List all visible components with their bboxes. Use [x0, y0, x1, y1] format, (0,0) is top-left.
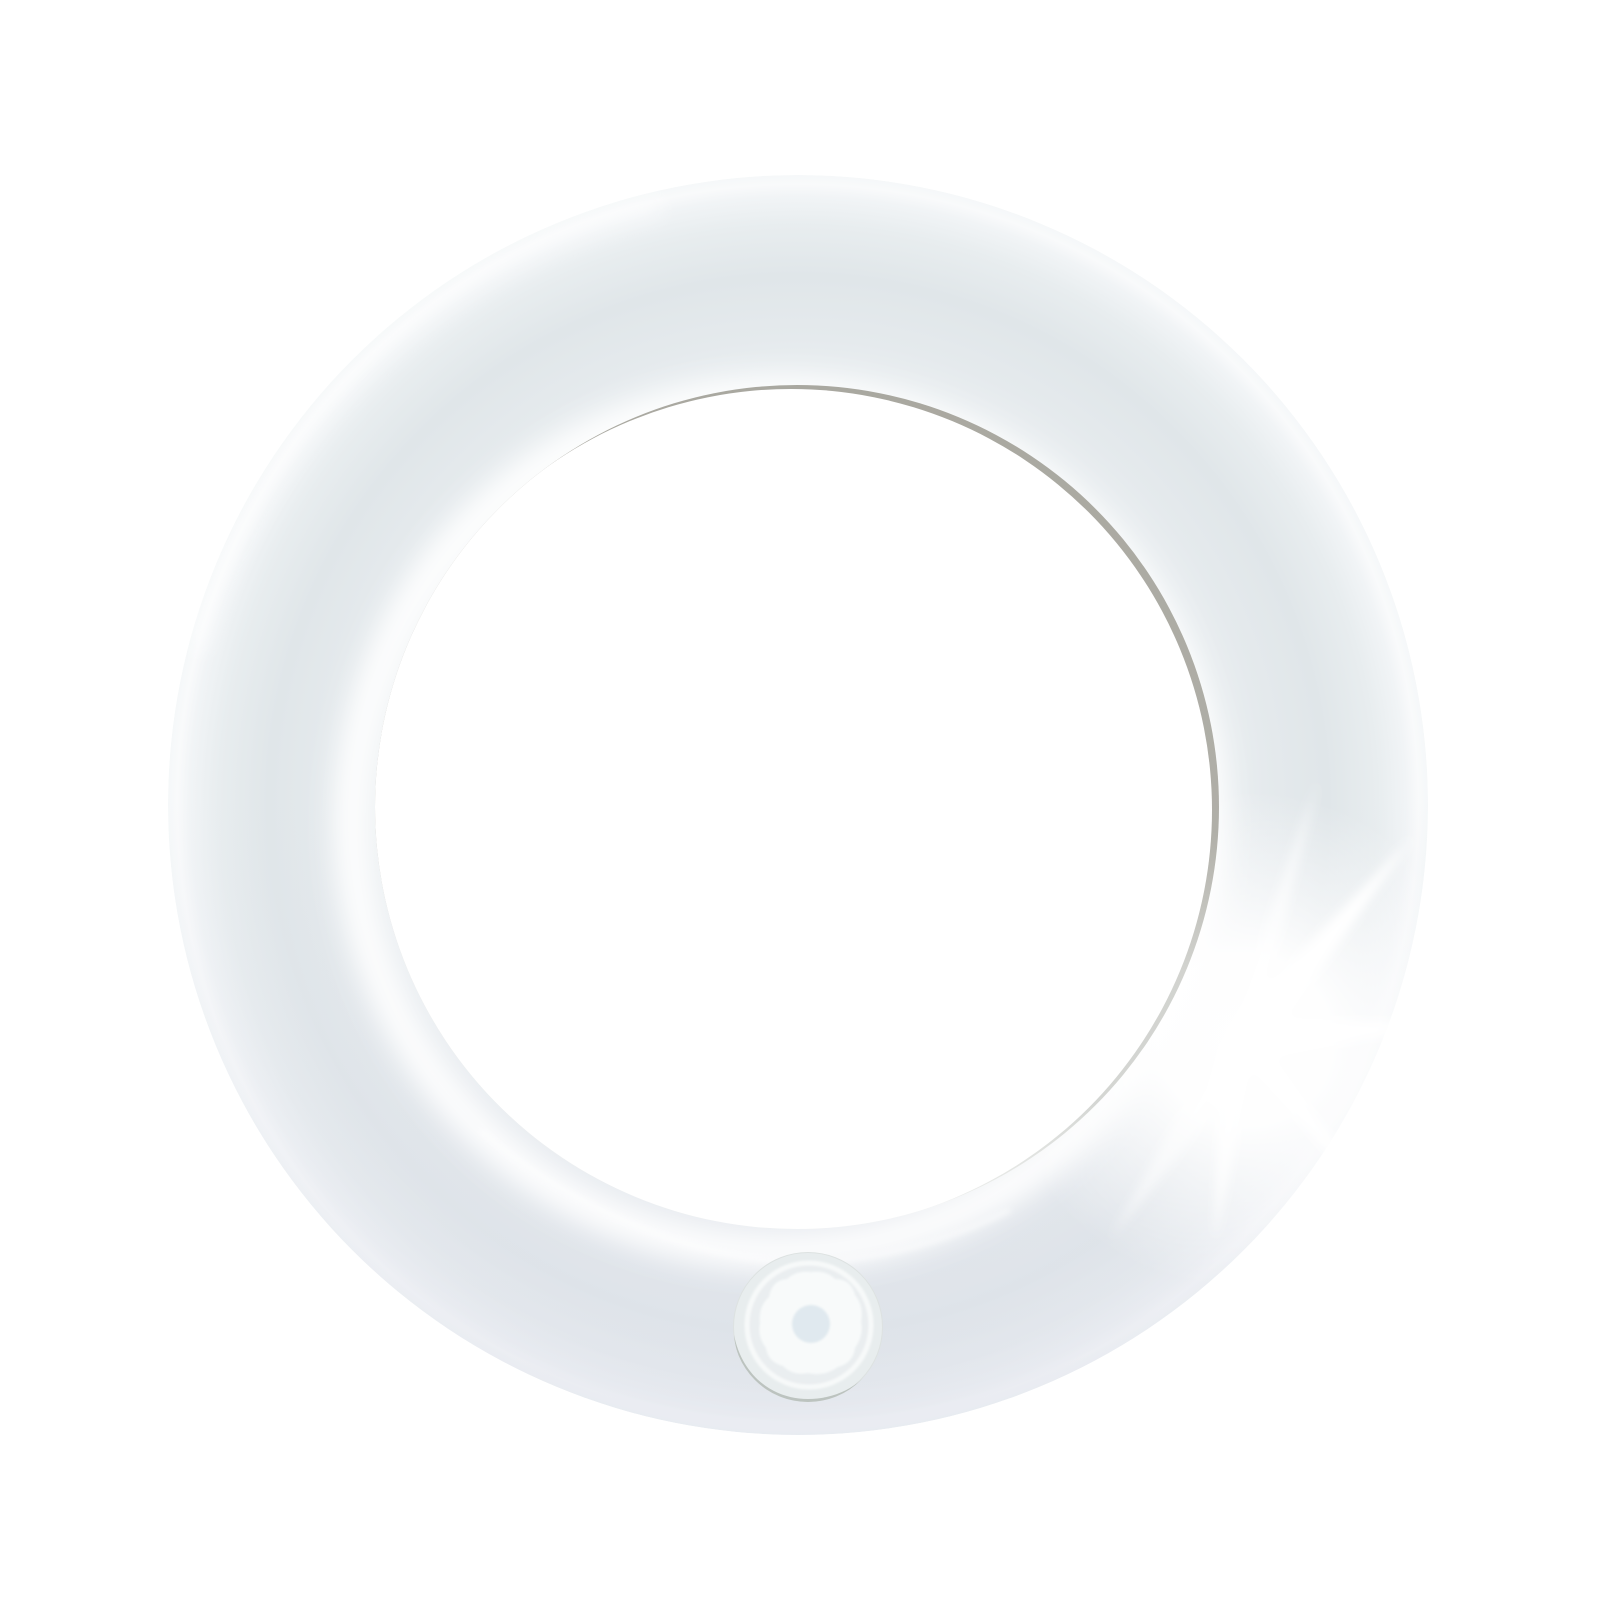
sensor lower lip shadow: [734, 1336, 862, 1402]
sensor concentric rings: [747, 1263, 871, 1387]
sensor centre eye: [792, 1305, 830, 1343]
inner edge glow, stronger left and bottom: [352, 396, 1208, 1252]
upper-left glossy band: [195, 205, 660, 650]
lower inner ridge: [480, 1130, 1010, 1262]
flare rays: [1320, 864, 1390, 946]
centre opening with metallic edge crescent: [370, 380, 1230, 1240]
product illustration: white LED ring light with motion sensor: [168, 175, 1428, 1435]
motion sensor: [734, 1252, 882, 1402]
lower-right light flare: [1095, 846, 1392, 1229]
sensor scalloped lens: [759, 1272, 862, 1374]
sensor outer dome: [734, 1252, 882, 1402]
ring body: [168, 175, 1495, 1435]
